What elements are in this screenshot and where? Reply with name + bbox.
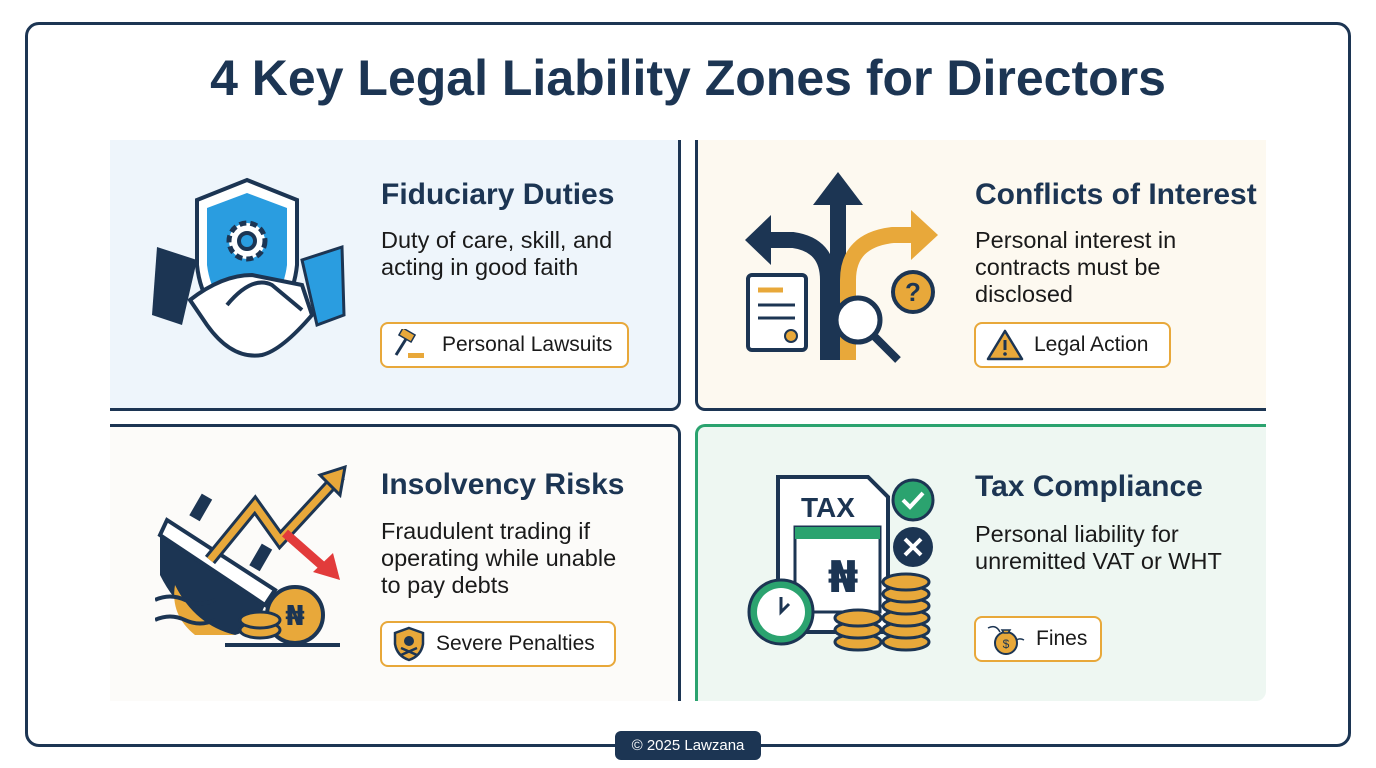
text: operating while unable xyxy=(381,545,616,571)
text xyxy=(381,227,612,280)
badge: fines: $ xyxy=(1003,637,1010,651)
badge: severe penalties xyxy=(380,621,616,667)
panel: insolvency risks xyxy=(110,424,681,701)
heading: Tax Compliance xyxy=(975,470,1203,503)
footer: copyright pill: © 2025 Lawzana xyxy=(632,737,744,754)
text: to pay debts xyxy=(381,572,509,598)
icon: tax document: ₦ xyxy=(828,552,858,603)
text: acting in good faith xyxy=(381,254,578,280)
text: Fraudulent trading if xyxy=(381,518,590,544)
icon: shield handshake xyxy=(152,178,346,358)
badge: fines: Fines xyxy=(1036,627,1087,650)
badge: personal lawsuits: Personal Lawsuits xyxy=(442,333,612,356)
badge: legal action: Legal Action xyxy=(1034,333,1148,356)
text: disclosed xyxy=(975,281,1073,307)
heading: Insolvency Risks xyxy=(381,468,624,501)
text: unremitted VAT or WHT xyxy=(975,548,1222,574)
icon: diverging arrows: ? xyxy=(905,277,921,307)
text: Personal liability for xyxy=(975,521,1179,547)
badge: legal action xyxy=(974,322,1171,368)
text: Personal interest in xyxy=(975,227,1176,253)
badge: severe penalties: Severe Penalties xyxy=(436,632,595,655)
panel: conflicts of interest xyxy=(695,140,1266,411)
panel: fiduciary duties xyxy=(110,140,681,411)
footer: copyright pill xyxy=(615,731,761,760)
heading: Fiduciary Duties xyxy=(381,178,614,211)
panel: tax compliance xyxy=(695,424,1266,701)
text: contracts must be xyxy=(975,254,1160,280)
text xyxy=(975,227,1176,307)
badge: fines xyxy=(974,616,1102,662)
badge: personal lawsuits xyxy=(380,322,629,368)
icon: diverging arrows xyxy=(745,172,938,363)
icon: sinking ship xyxy=(155,465,347,647)
icon: tax document: TAX xyxy=(801,492,855,523)
icon: sinking ship: ₦ xyxy=(285,599,305,632)
text xyxy=(975,521,1222,574)
icon: tax document xyxy=(748,475,934,652)
text xyxy=(381,518,616,598)
text: Duty of care, skill, and xyxy=(381,227,612,253)
title: 4 Key Legal Liability Zones for Directors xyxy=(210,50,1166,106)
heading: Conflicts of Interest xyxy=(975,178,1257,211)
